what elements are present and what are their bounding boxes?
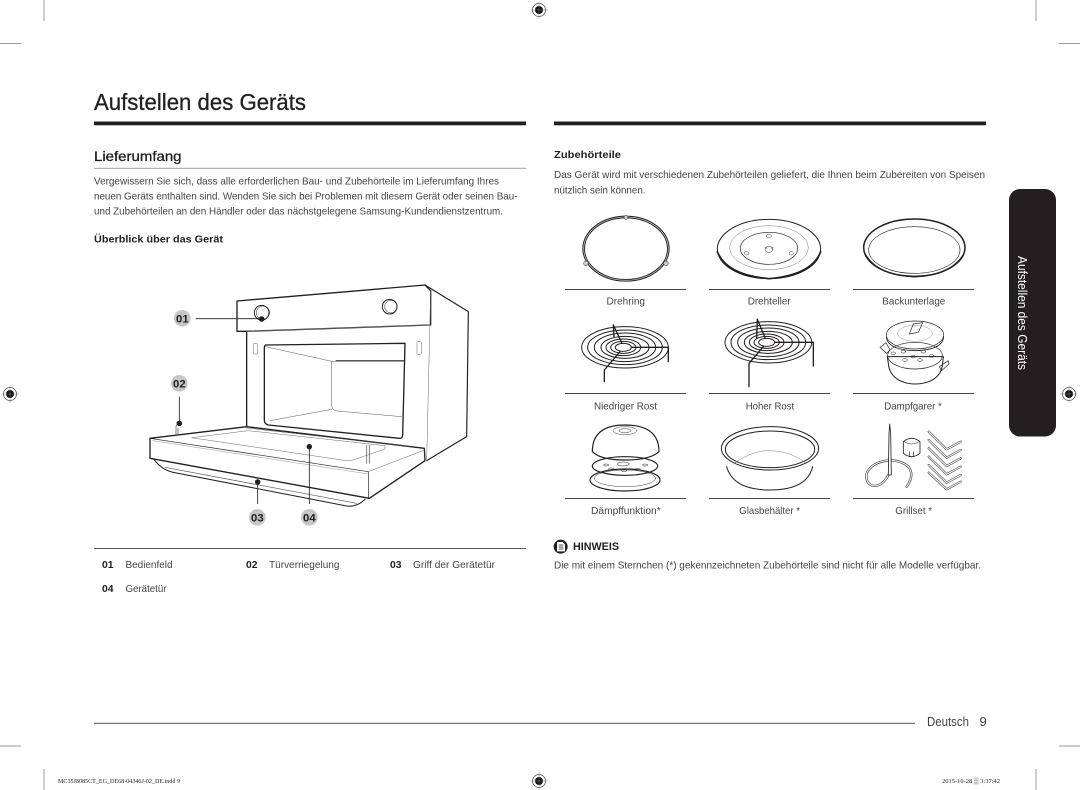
open door xyxy=(150,427,425,498)
parts legend xyxy=(102,560,496,595)
accessory labels: Drehteller xyxy=(748,296,791,308)
intro paragraph xyxy=(94,176,518,218)
accessory labels: Hoher Rost xyxy=(746,402,794,412)
parts legend: Gerätetür xyxy=(126,584,167,595)
badge 03 xyxy=(249,509,266,526)
accessory labels: Dampfgarer * xyxy=(884,402,942,412)
accessory labels: Niedriger Rost xyxy=(594,402,657,412)
microwave body xyxy=(150,285,468,506)
registration mark right xyxy=(1060,386,1078,402)
page footer: 9 xyxy=(980,714,987,729)
icon: Backunterlage xyxy=(864,219,965,277)
print slug right: 2015-10-28 ▒ 3:37:42 xyxy=(942,777,1000,785)
door latches xyxy=(176,423,181,436)
intro paragraph: neuen Geräts enthalten sind. Wenden Sie sich bei Problemen mit diesem Gerät oder seinen Bau- xyxy=(94,192,518,202)
note text: Die mit einem Sternchen (*) gekennzeichneten Zubehörteile sind nicht für alle Modelle verfügbar. xyxy=(554,560,981,572)
print slug left: MC35J8085CT_EG_DE68-04346J-02_DE.indd 9 xyxy=(58,778,180,785)
footer rule xyxy=(94,723,915,724)
icon: Drehring xyxy=(584,215,668,280)
accessory labels: Drehring xyxy=(606,296,645,308)
badge 02 xyxy=(171,375,188,392)
icon: Dampfgarer xyxy=(880,321,949,384)
heading rule xyxy=(94,168,526,169)
page footer: Deutsch xyxy=(927,714,969,729)
icon: Drehteller xyxy=(717,219,821,279)
icon: Glasbehälter xyxy=(721,427,819,490)
control knobs xyxy=(254,305,269,320)
side tab: Aufstellen des Geräts xyxy=(1015,256,1029,370)
title: Aufstellen des Geräts xyxy=(94,89,306,115)
badge 04 xyxy=(301,509,318,526)
parts legend: Griff der Gerätetür xyxy=(413,560,496,571)
accessory labels: Grillset * xyxy=(895,506,932,517)
door handle xyxy=(154,459,365,506)
title rule left xyxy=(94,122,526,125)
registration mark left xyxy=(2,386,18,402)
accessory labels: Glasbehälter * xyxy=(739,506,800,517)
parts legend: 04 xyxy=(102,584,114,595)
icon: note xyxy=(554,540,568,554)
accessories paragraph: Das Gerät wird mit verschiedenen Zubehörteilen geliefert, die Ihnen beim Zubereiten von Speisen xyxy=(554,170,985,181)
parts legend: Bedienfeld xyxy=(126,560,173,571)
side tab xyxy=(1009,189,1056,436)
accessory labels xyxy=(591,296,946,517)
icon: Hoher Rost xyxy=(725,319,813,387)
registration mark bottom xyxy=(530,772,548,790)
badge 02: 02 xyxy=(173,378,186,390)
legend rule xyxy=(94,548,526,549)
parts legend: 03 xyxy=(390,560,402,571)
intro paragraph: Vergewissern Sie sich, dass alle erforderlichen Bau- und Zubehörteile im Lieferumfang Ihres xyxy=(94,176,499,188)
section heading: Lieferumfang: Lieferumfang xyxy=(94,148,182,164)
badge 04: 04 xyxy=(303,512,316,524)
parts legend: 02 xyxy=(246,560,258,571)
accessory labels: Dämpffunktion* xyxy=(591,506,661,517)
oven cavity xyxy=(264,343,405,438)
parts legend: 01 xyxy=(102,560,114,571)
accessory labels: Backunterlage xyxy=(882,296,946,308)
icon: Dämpffunktion xyxy=(590,425,660,491)
badge 01 xyxy=(174,310,191,327)
accessories paragraph: nützlich sein können. xyxy=(554,186,646,196)
callout lines xyxy=(177,317,312,504)
title rule right xyxy=(554,122,986,125)
accessories paragraph xyxy=(554,170,985,196)
accessory rules xyxy=(565,289,974,499)
badge 01: 01 xyxy=(176,313,189,325)
badge 03: 03 xyxy=(251,512,264,524)
microwave diagram xyxy=(150,285,468,526)
icon: Grillset xyxy=(866,424,961,489)
parts legend: Türverriegelung xyxy=(269,560,340,571)
subheading: overview: Überblick über das Gerät xyxy=(94,233,224,246)
subheading: accessories: Zubehörteile xyxy=(554,150,621,161)
registration mark top xyxy=(530,2,548,18)
note heading: HINWEIS xyxy=(573,541,619,553)
icon: Niedriger Rost xyxy=(582,325,668,382)
intro paragraph: und Zubehörteilen an den Händler oder das nächstgelegene Samsung-Kundendienstzentrum. xyxy=(94,206,503,218)
